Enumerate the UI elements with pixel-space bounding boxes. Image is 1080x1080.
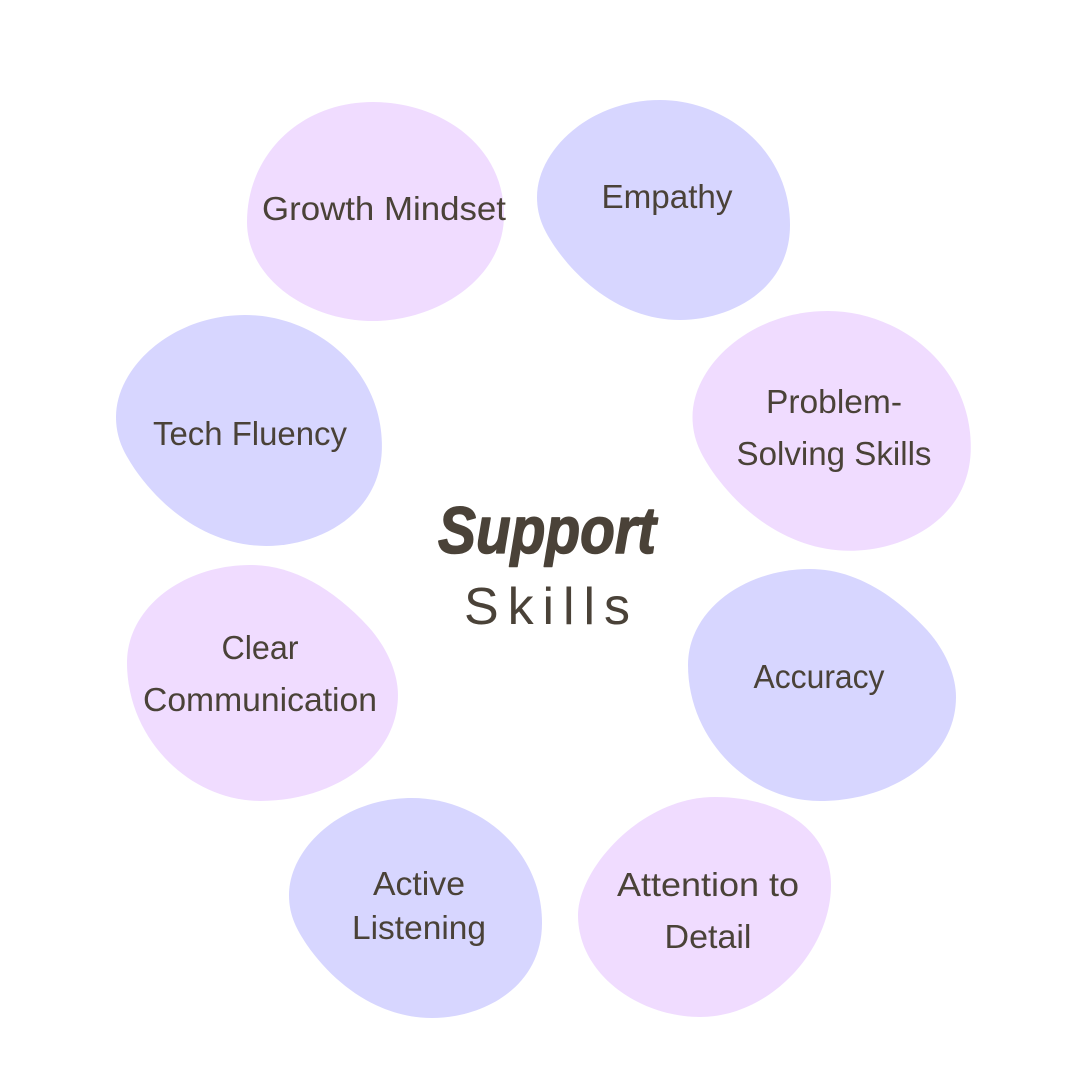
label: Clear Communication: Communication (143, 681, 377, 718)
blob: Problem-Solving Skills (692, 311, 971, 551)
label: Accuracy: Accuracy (754, 658, 885, 695)
subheading: Skills: Skills (464, 578, 630, 636)
blob: Clear Communication (127, 565, 398, 801)
blob: Growth Mindset (247, 102, 506, 321)
label: Active Listening: Active (373, 865, 465, 902)
label: Attention to Detail (617, 866, 799, 955)
label: Growth Mindset: Growth Mindset (262, 190, 506, 227)
label: Problem-Solving Skills: Problem- (766, 383, 902, 420)
blob: Accuracy (688, 569, 956, 801)
label: Attention to Detail: Detail (664, 918, 752, 955)
blob: Tech Fluency (116, 315, 382, 546)
label: Tech Fluency: Tech Fluency (153, 415, 347, 452)
label: Attention to Detail: Attention to (617, 866, 799, 903)
label: Clear Communication: Clear (222, 629, 299, 666)
blob: Attention to Detail (578, 797, 831, 1017)
label: Problem-Solving Skills: Solving Skills (736, 435, 932, 472)
blob: Active Listening (289, 798, 542, 1018)
blob: Empathy (537, 100, 790, 320)
center title (438, 493, 659, 636)
label: Active Listening: Listening (352, 909, 486, 946)
label: Problem-Solving Skills (736, 383, 932, 472)
heading: Support: Support (438, 493, 659, 567)
label: Active Listening (352, 865, 486, 946)
label: Empathy: Empathy (602, 178, 733, 215)
label: Clear Communication (143, 629, 377, 718)
